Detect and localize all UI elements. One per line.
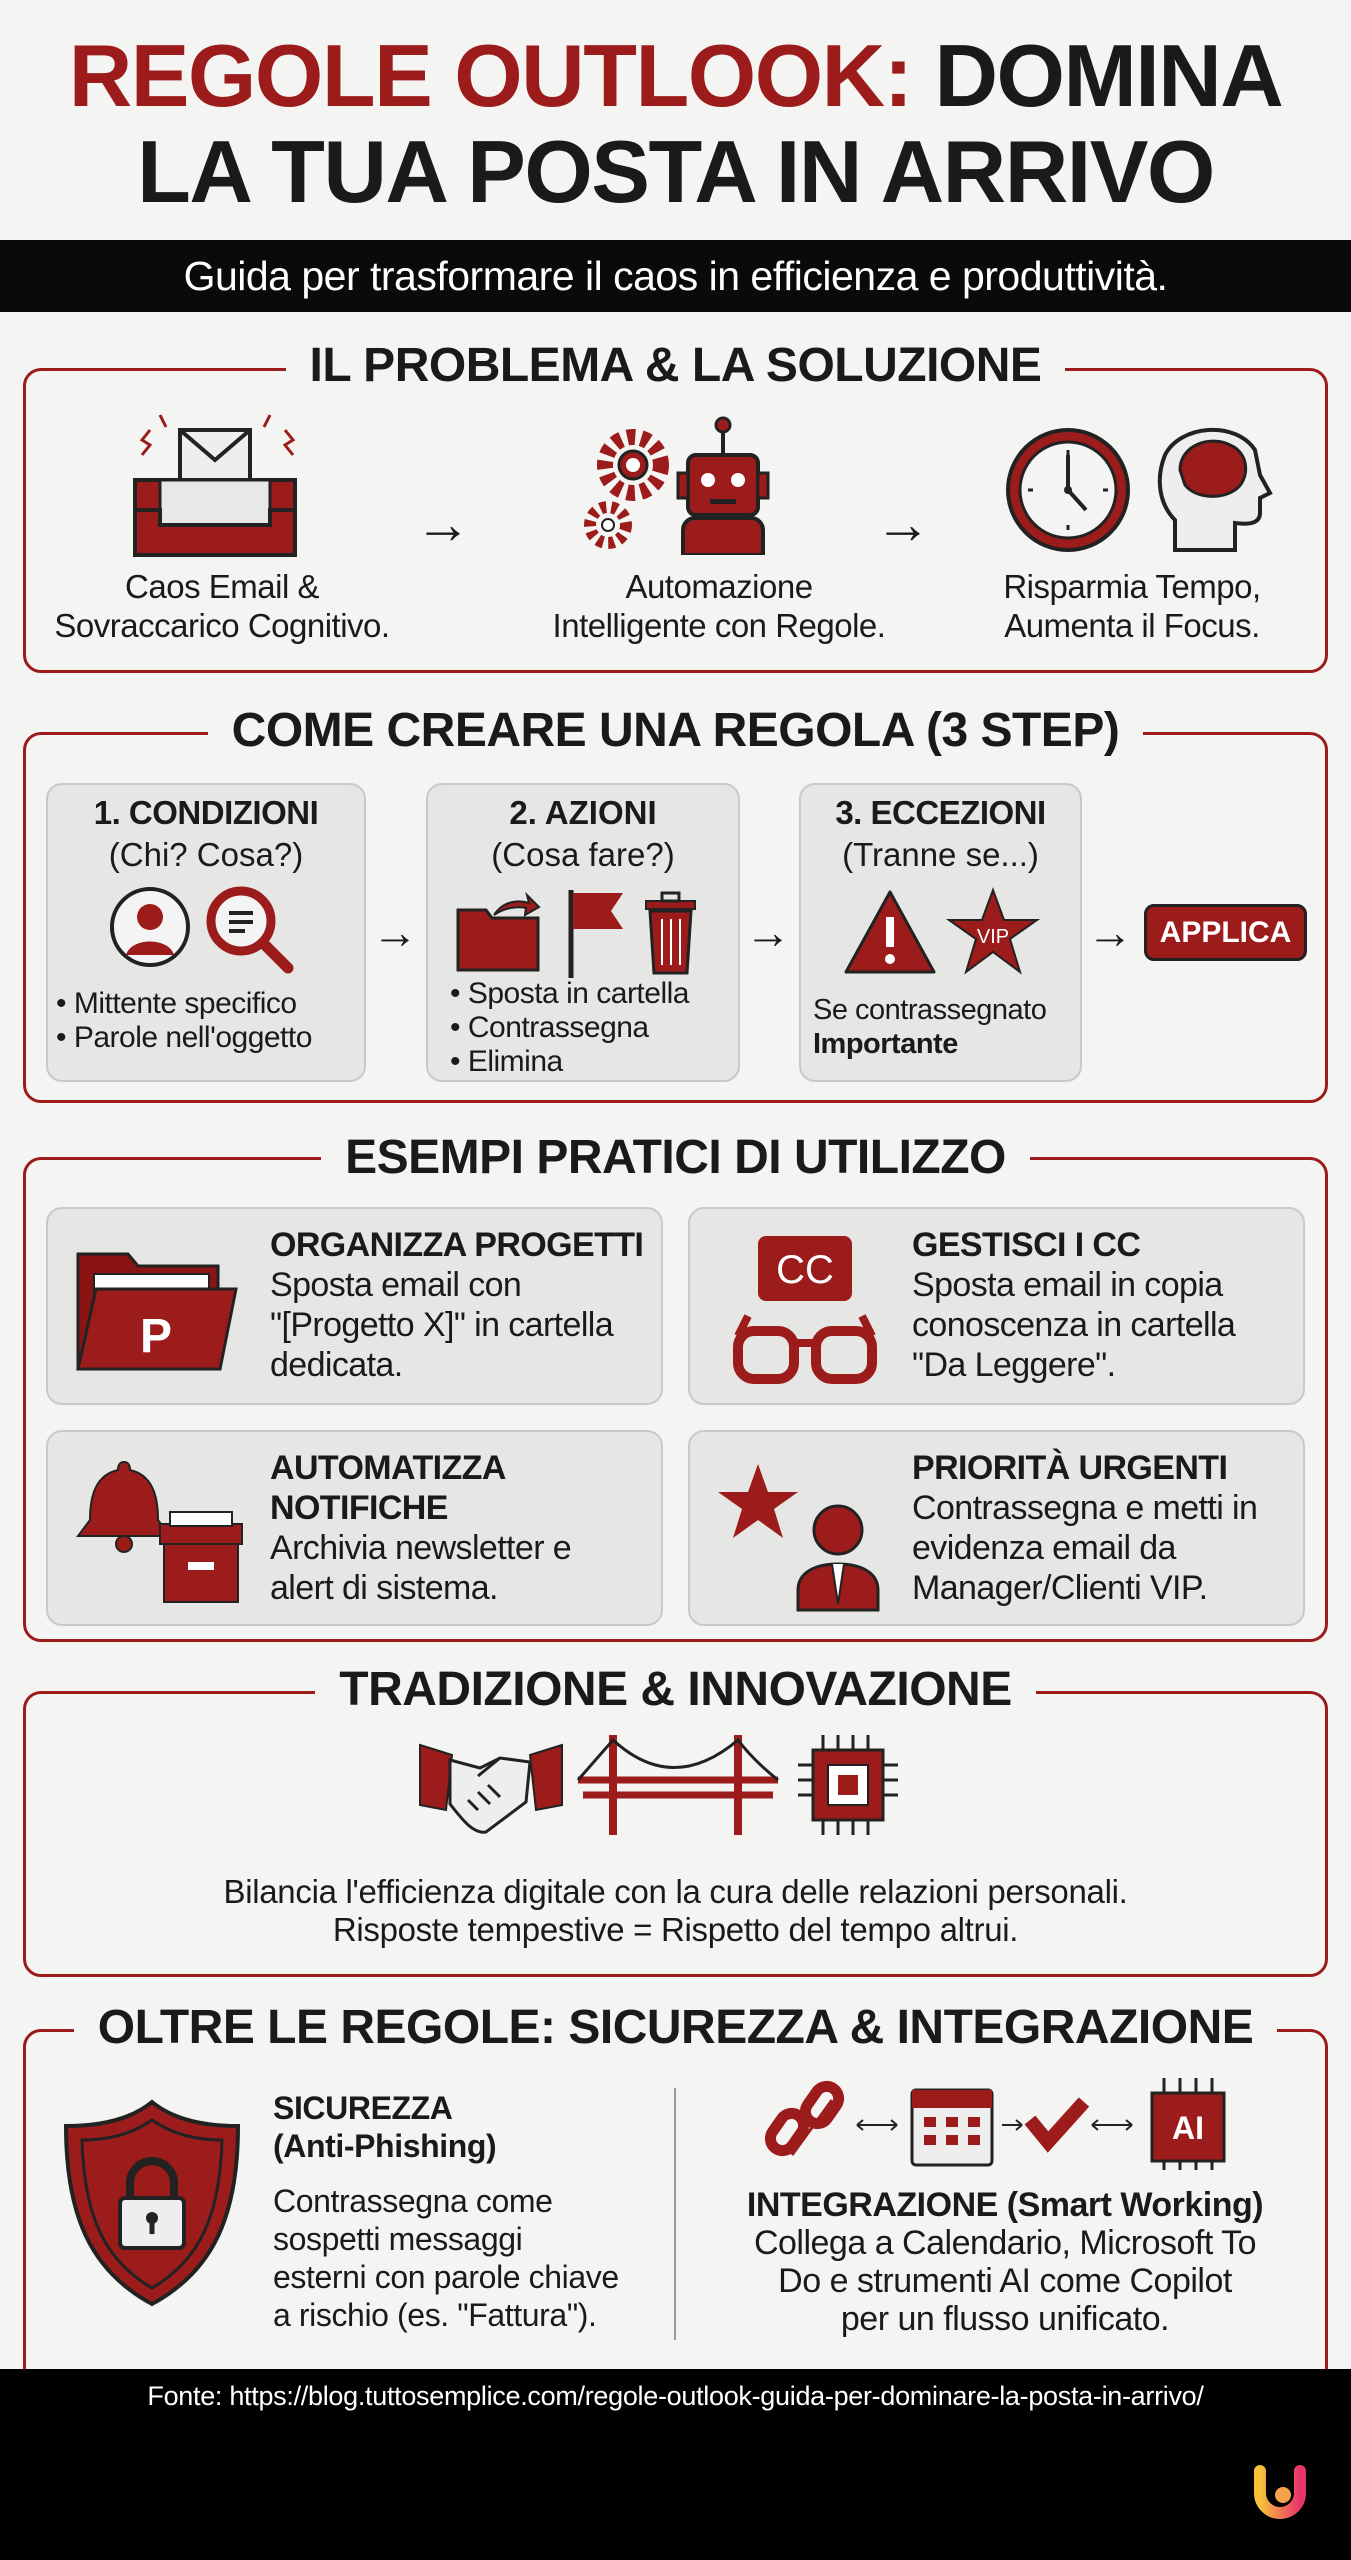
card: azioni: • Sposta in cartella: [450, 977, 689, 1010]
card: priorità urgenti: [688, 1430, 1305, 1626]
icon: folder P: P: [140, 1310, 172, 1363]
text: tradizione: Bilancia l'efficienza digitale con la cura delle relazioni personali.: [223, 1873, 1128, 1910]
card: organizza progetti: dedicata.: [270, 1346, 403, 1384]
text: sicurezza: [273, 2090, 496, 2164]
card: condizioni: • Parole nell'oggetto: [56, 1021, 312, 1054]
card: automatizza notifiche: AUTOMATIZZA: [270, 1449, 506, 1487]
caption: caos: Caos Email &: [125, 568, 319, 605]
card: azioni: [426, 783, 740, 1082]
caption: caos: Sovraccarico Cognitivo.: [54, 607, 390, 644]
text: sospetti messaggi: [273, 2221, 522, 2257]
icon: vip star: VIP: [977, 926, 1009, 948]
card: condizioni: 1. CONDIZIONI: [94, 794, 318, 831]
heading: oltre: OLTRE LE REGOLE: SICUREZZA & INTEGRAZIONE: [98, 2001, 1253, 2054]
card: azioni: • Contrassegna: [450, 1011, 649, 1044]
text: esterni con parole chiave: [273, 2259, 619, 2295]
title: [69, 26, 1282, 221]
card: gestisci cc: conoscenza in cartella: [912, 1306, 1235, 1344]
icon: brain head: [1158, 428, 1273, 552]
icon: trash: [645, 892, 696, 974]
icon: vip star: [946, 887, 1040, 974]
text: integrazione: [747, 2186, 1263, 2338]
text: sicurezza: (Anti-Phishing): [273, 2128, 496, 2164]
icon: folder move: [456, 892, 541, 972]
caption: automazione: Automazione: [625, 568, 813, 605]
icon: cc glasses: [733, 1236, 877, 1384]
card: eccezioni: (Tranne se...): [842, 836, 1039, 873]
button: applica: [1144, 904, 1307, 961]
icon: inbox chaos: [133, 414, 297, 557]
text: a rischio (es. "Fattura").: [273, 2297, 597, 2333]
icon: clock: [1006, 428, 1130, 552]
title: LA TUA POSTA IN ARRIVO: [137, 122, 1214, 221]
card: gestisci cc: Sposta email in copia: [912, 1266, 1223, 1304]
card: organizza progetti: [46, 1207, 663, 1405]
icons: handshake bridge chip: [419, 1735, 898, 1835]
icons: integrazione flow: [764, 2078, 1226, 2170]
card: gestisci cc: [688, 1207, 1305, 1405]
button: applica: APPLICA: [1160, 916, 1291, 949]
arrow: →: [745, 906, 791, 958]
card: azioni: (Cosa fare?): [491, 836, 675, 873]
heading: esempi: ESEMPI PRATICI DI UTILIZZO: [345, 1131, 1006, 1184]
panel: tradizione: [23, 1691, 1328, 1977]
card: automatizza notifiche: alert di sistema.: [270, 1569, 498, 1607]
card: priorità urgenti: Contrassegna e metti in: [912, 1489, 1257, 1527]
text: tradizione: Risposte tempestive = Rispetto del tempo altrui.: [333, 1911, 1018, 1948]
card: eccezioni: [799, 783, 1082, 1082]
icons: integrazione flow: AI: [1172, 2110, 1204, 2146]
footer: [0, 2369, 1351, 2560]
caption: risparmia: Risparmia Tempo,: [1003, 568, 1261, 605]
text: tradizione: [223, 1873, 1128, 1948]
panel: oltre le regole: [23, 2029, 1328, 2429]
text: sicurezza: SICUREZZA: [273, 2090, 453, 2126]
caption: automazione: Intelligente con Regole.: [553, 607, 885, 644]
icon: warning: [844, 890, 936, 974]
icon: bell box: [76, 1461, 243, 1603]
panel: esempi: [23, 1157, 1328, 1642]
icon: folder P: [76, 1252, 238, 1370]
title: REGOLE OUTLOOK: DOMINA: [69, 26, 1282, 125]
arrow: →: [1087, 906, 1133, 958]
icon: star manager: [718, 1464, 880, 1612]
card: automatizza notifiche: NOTIFICHE: [270, 1489, 448, 1527]
icon: gears robot: [584, 416, 770, 555]
text: integrazione: per un flusso unificato.: [841, 2300, 1169, 2338]
subtitle bar: [0, 240, 1351, 312]
card: organizza progetti: Sposta email con: [270, 1266, 521, 1304]
card: organizza progetti: "[Progetto X]" in cartella: [270, 1306, 613, 1344]
card: azioni: 2. AZIONI: [509, 794, 657, 831]
icon: user: [110, 887, 190, 967]
card: eccezioni: Se contrassegnato: [813, 994, 1046, 1026]
card: azioni: • Elimina: [450, 1045, 563, 1078]
heading: problema: IL PROBLEMA & LA SOLUZIONE: [310, 339, 1041, 392]
arrow: →: [875, 492, 931, 555]
arrow: →: [415, 492, 471, 555]
card: gestisci cc: GESTISCI I CC: [912, 1226, 1140, 1264]
text: integrazione: Do e strumenti AI come Copilot: [778, 2262, 1232, 2300]
source text: Fonte: https://blog.tuttosemplice.com/regole-outlook-guida-per-dominare-la-posta-in-arrivo/: [147, 2381, 1204, 2411]
card: automatizza notifiche: [46, 1430, 663, 1626]
caption: caos: [54, 568, 390, 644]
caption: automazione: [553, 568, 885, 644]
card: condizioni: (Chi? Cosa?): [109, 836, 303, 873]
heading: come creare: COME CREARE UNA REGOLA (3 STEP): [232, 704, 1119, 757]
card: condizioni: • Mittente specifico: [56, 987, 297, 1020]
icon: logo: [1254, 2465, 1306, 2519]
subtitle bar: Guida per trasformare il caos in efficienza e produttività.: [184, 253, 1167, 299]
card: organizza progetti: ORGANIZZA PROGETTI: [270, 1226, 643, 1264]
card: automatizza notifiche: Archivia newsletter e: [270, 1529, 571, 1567]
text: integrazione: INTEGRAZIONE (Smart Working): [747, 2186, 1263, 2224]
caption: risparmia: [1003, 568, 1261, 644]
card: priorità urgenti: PRIORITÀ URGENTI: [912, 1449, 1227, 1487]
panel: come creare: [23, 732, 1328, 1103]
card: priorità urgenti: evidenza email da: [912, 1529, 1176, 1567]
panel: problema & soluzione: [23, 368, 1328, 673]
icon: cc glasses: CC: [776, 1248, 834, 1292]
card: eccezioni: Importante: [813, 1028, 958, 1060]
icon: shield lock: [64, 2100, 240, 2306]
icon: search: [206, 886, 294, 974]
heading: tradizione: TRADIZIONE & INNOVAZIONE: [339, 1663, 1012, 1716]
caption: risparmia: Aumenta il Focus.: [1004, 607, 1260, 644]
card: condizioni: [46, 783, 366, 1082]
card: gestisci cc: "Da Leggere".: [912, 1346, 1115, 1384]
text: Contrassegna come: [273, 2183, 553, 2219]
card: eccezioni: 3. ECCEZIONI: [835, 794, 1046, 831]
arrow: →: [372, 906, 418, 958]
text: integrazione: Collega a Calendario, Microsoft To: [754, 2224, 1256, 2262]
icon: flag: [568, 890, 623, 978]
card: priorità urgenti: Manager/Clienti VIP.: [912, 1569, 1207, 1607]
